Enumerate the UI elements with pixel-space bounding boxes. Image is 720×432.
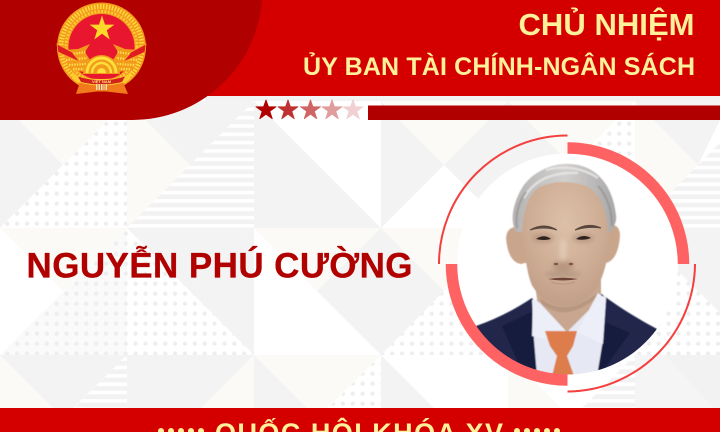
- neck: [535, 278, 601, 333]
- icon: national emblem of Vietnam: [57, 2, 146, 94]
- banner and scroll: [76, 82, 128, 94]
- cogwheel: [83, 55, 120, 74]
- background: geometric tile pattern: [0, 96, 720, 432]
- footer band: [0, 408, 720, 432]
- necktie: [545, 331, 577, 376]
- accent bar: [368, 106, 720, 120]
- ears: [506, 227, 529, 264]
- right rice sheaf: [113, 44, 141, 72]
- header band: [0, 0, 720, 96]
- title: position: CHỦ NHIỆM: [518, 6, 694, 42]
- suit: [476, 293, 658, 370]
- portrait with ring frame: [439, 136, 695, 392]
- icon: national emblem of Vietnam: VIỆT NAM: [92, 79, 112, 84]
- shirt: [532, 296, 606, 376]
- subtitle: committee: ỦY BAN TÀI CHÍNH-NGÂN SÁCH: [303, 51, 695, 81]
- collar: [532, 298, 566, 339]
- hair: [513, 164, 616, 234]
- red side ribbons: [57, 44, 80, 62]
- thick ring arcs: [568, 148, 684, 264]
- facial shading: [532, 233, 594, 278]
- name heading: NGUYỄN PHÚ CƯỜNG: [26, 246, 412, 286]
- header dark red rounded panel: [0, 0, 262, 120]
- white portrait circle: [457, 154, 678, 374]
- left rice sheaf: [62, 44, 90, 72]
- icon: five fading stars: [256, 100, 363, 119]
- facial features: [530, 225, 601, 284]
- thin ring arcs: [439, 136, 568, 264]
- footer dots: right: [514, 428, 560, 432]
- face: [522, 182, 608, 292]
- portrait photo: [470, 164, 660, 380]
- footer dots: left: [158, 428, 204, 432]
